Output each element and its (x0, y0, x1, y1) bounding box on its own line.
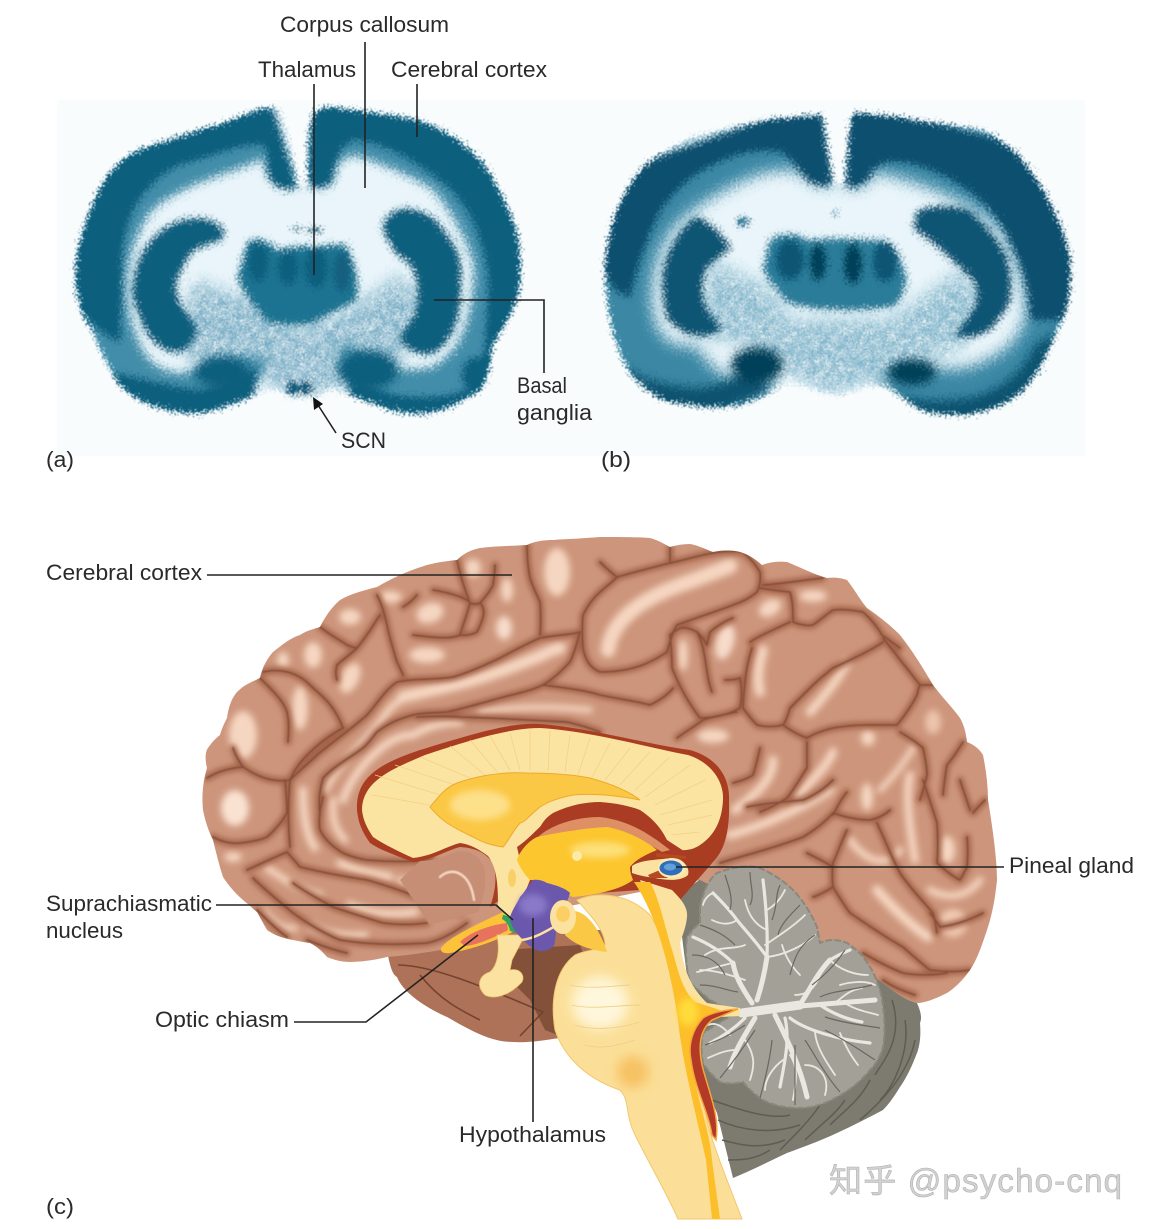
mammillary and hypothalamic gold (565, 911, 607, 952)
label: Basal ganglia: Basal (517, 373, 567, 398)
label: Basal ganglia (434, 300, 593, 425)
brainstem (553, 880, 742, 1219)
label: Suprachiasmatic nucleus: Suprachiasmatic (46, 891, 212, 916)
watermark: 知乎 @psycho-cnq (829, 1162, 1122, 1199)
panel c: sagittal brain illustration (202, 537, 997, 1219)
fourth ventricle red band (690, 1009, 738, 1140)
label: (a): (a) (46, 447, 74, 472)
label: Cerebral cortex (slice): Cerebral cortex (391, 57, 547, 82)
panel a: brain slice autoradiograph (60, 95, 540, 420)
pituitary (480, 935, 525, 997)
panel b: brain slice autoradiograph (590, 100, 1085, 425)
pineal gland (658, 858, 686, 878)
label: Hypothalamus: Hypothalamus (459, 1122, 606, 1147)
panel: autoradiograph background (57, 100, 1085, 456)
callosum pale yellow (362, 728, 723, 925)
label: Optic chiasm: Optic chiasm (155, 1007, 289, 1032)
corpus callosum surround (357, 724, 729, 907)
cerebellum dark lower lobe (677, 877, 921, 1178)
label: Suprachiasmatic nucleus (46, 891, 513, 943)
callosum radial fibers (372, 730, 712, 835)
optic tract (441, 912, 516, 953)
fornix red band (537, 802, 687, 856)
hypothalamus (510, 880, 570, 951)
label: Optic chiasm (155, 935, 478, 1032)
temporal lobe (387, 930, 620, 1042)
mammillary body (550, 900, 576, 934)
label: (c): (c) (46, 1194, 74, 1219)
label and arrow: SCN: SCN (341, 428, 386, 453)
cerebral cortex (202, 537, 997, 1003)
label: Cerebral cortex: Cerebral cortex (46, 560, 202, 585)
fornix textured band (537, 817, 670, 852)
cingulate gold region (430, 773, 640, 847)
label: Pineal gland: Pineal gland (1009, 853, 1134, 878)
label: Suprachiasmatic nucleus: nucleus (46, 918, 123, 943)
label: Thalamus: Thalamus (258, 57, 356, 82)
subcallosal gyrus (400, 851, 485, 925)
label: Basal ganglia: ganglia (517, 400, 593, 425)
tectum and gold aqueduct (640, 880, 740, 1050)
label: (b): (b) (601, 447, 631, 472)
label: Corpus callosum: Corpus callosum (280, 12, 449, 37)
pineal stalk (632, 858, 688, 880)
label and arrow: SCN (313, 397, 386, 453)
thalamus gold (517, 827, 657, 897)
cerebellum gray with white arbor (686, 866, 884, 1108)
